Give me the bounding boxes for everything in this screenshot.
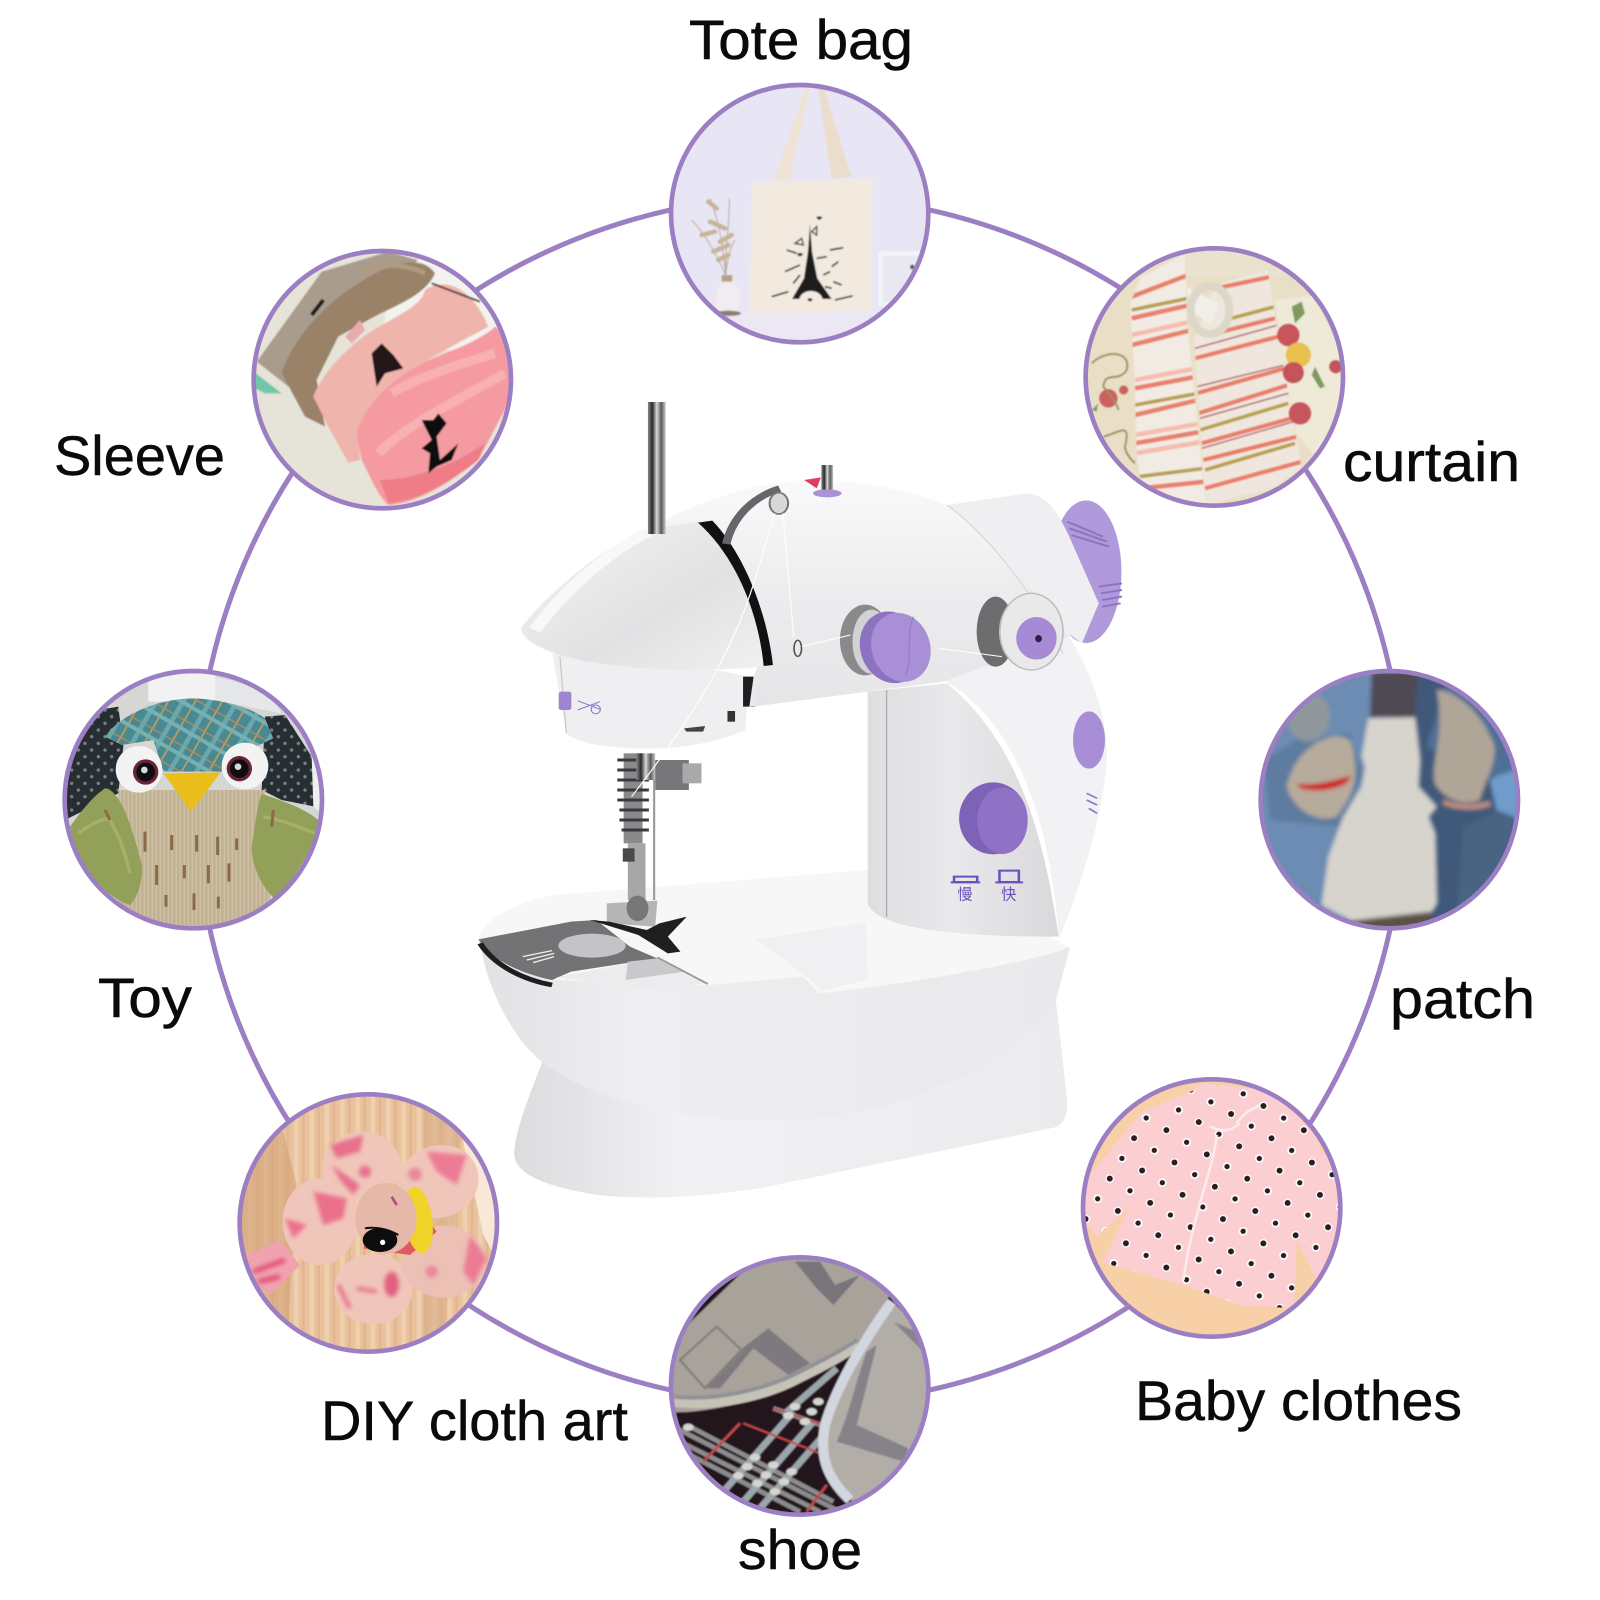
panel: curtain xyxy=(1083,246,1346,508)
photo: tote bag xyxy=(691,88,920,317)
label: curtain: curtain xyxy=(1343,430,1520,493)
photo: curtain xyxy=(1090,252,1340,504)
sewing machine xyxy=(478,402,1122,1198)
photo: patched jeans xyxy=(1266,673,1516,926)
speed buttons and labels xyxy=(951,782,1097,903)
panel: sleeve xyxy=(251,248,514,511)
panel: toy xyxy=(62,668,324,931)
connecting ring xyxy=(196,196,1404,1404)
label: DIY cloth art: DIY cloth art xyxy=(321,1389,628,1452)
panel: patch xyxy=(1258,668,1520,931)
panel: shoe xyxy=(668,1255,931,1517)
panel: tote bag xyxy=(668,82,931,345)
speed buttons and labels: 快 xyxy=(1001,886,1016,903)
photo: fabric flower xyxy=(242,1096,495,1350)
machine arm and column xyxy=(521,402,1122,938)
label: Tote bag: Tote bag xyxy=(689,8,913,71)
photo: slippers xyxy=(673,1260,926,1512)
label: patch: patch xyxy=(1390,967,1535,1030)
photo: baby jacket xyxy=(1085,1084,1338,1308)
panel: baby clothes xyxy=(1080,1077,1343,1339)
panel: DIY cloth art xyxy=(237,1092,500,1354)
speed buttons and labels: 慢 xyxy=(957,886,973,903)
needle assembly xyxy=(590,753,701,953)
photo: sleeves xyxy=(256,254,509,506)
label: Toy: Toy xyxy=(98,966,192,1029)
label: Sleeve: Sleeve xyxy=(54,424,225,487)
photo: fabric owl xyxy=(67,674,320,926)
label: Baby clothes: Baby clothes xyxy=(1135,1369,1462,1432)
label: shoe: shoe xyxy=(738,1518,862,1581)
machine base xyxy=(478,870,1070,1198)
